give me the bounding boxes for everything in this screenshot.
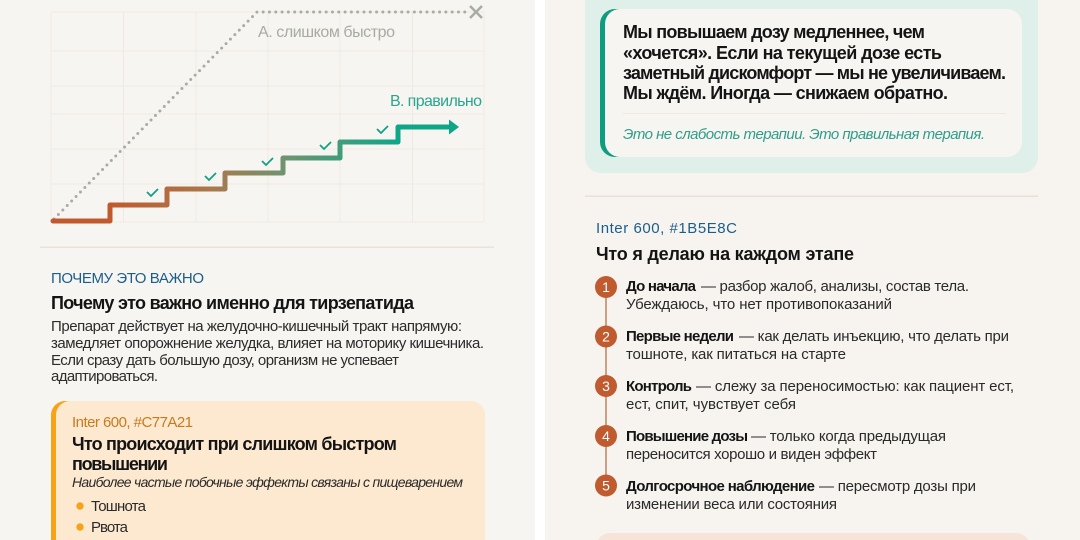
quote text: Мы ждём. Иногда — снижаем обратно. [623,83,948,103]
callout title: повышении [72,454,168,474]
step 5: 5 [602,478,610,494]
callout eyebrow: Inter 600, #C77A21 [72,414,193,431]
step 4: — только когда предыдущая [751,428,946,445]
step 2 [595,326,1009,363]
step 1 [595,276,969,313]
dotted line: too fast [54,12,470,219]
callout subtitle: Наиболее частые побочные эффекты связаны с пищеварением [72,474,463,490]
bullet: vomiting: Рвота [91,519,129,536]
step 2: — как делать инъекцию, что делать при [739,328,1009,345]
timeline: steps [595,276,1014,513]
body text [51,318,484,385]
line chart: dose escalation [51,6,484,222]
step 3: — слежу за переносимостью: как пациент ест, [696,378,1014,395]
step 5 [595,474,976,513]
step 3: Контроль [626,378,692,395]
step 5: изменении веса или состояния [626,496,837,513]
step 1: — разбор жалоб, анализы, состав тела. [701,278,969,295]
callout title [72,434,397,474]
quote text [623,22,1006,103]
step 3: 3 [602,378,610,394]
step 4: Повышение дозы [626,428,748,445]
callout: side effects [51,401,485,540]
step 2: Первые недели [626,328,734,345]
callout: principle [585,0,1038,173]
step 3 [595,375,1014,413]
icons: check marks [147,126,388,196]
stepped line: correct [53,127,450,221]
step 5: Долгосрочное наблюдение [626,478,815,495]
step 1: До начала [626,278,697,295]
label: too fast: А. слишком быстро [258,24,395,41]
body text: Препарат действует на желудочно-кишечный тракт напрямую: [51,318,462,335]
callout title: Что происходит при слишком быстром [72,434,397,454]
step 5: — пересмотр дозы при [819,478,976,495]
step 2: 2 [602,328,610,344]
step 3: ест, спит, чувствует себя [626,396,796,413]
body text: адаптироваться. [51,368,158,385]
eyebrow heading: Inter 600, #1B5E8C [596,220,737,237]
heading: Что я делаю на каждом этапе [596,244,854,264]
body text: замедляет опорожнение желудка, влияет на моторику кишечника. [51,335,484,352]
step 2: тошноте, как питаться на старте [626,346,846,363]
eyebrow heading: ПОЧЕМУ ЭТО ВАЖНО [51,270,204,287]
heading: Почему это важно именно для тирзепатида [51,293,415,313]
icon: cross [470,6,482,18]
quote text: «хочется». Если на текущей дозе есть [623,43,942,63]
quote text: заметный дискомфорт — мы не увеличиваем. [623,63,1006,83]
bullet: nausea: Тошнота [91,498,147,515]
panel: right column [545,0,1080,540]
step 1: Убеждаюсь, что нет противопоказаний [626,296,892,313]
quote text: Мы повышаем дозу медленнее, чем [623,22,925,42]
panel: left column [0,0,535,540]
body text: Если сразу дать большую дозу, организм не успевает [51,352,399,369]
step 4: переносится хорошо и виден эффект [626,446,877,463]
step 4 [595,425,946,463]
label: correct: В. правильно [390,93,482,110]
arrowhead [449,120,459,134]
quote conclusion: Это не слабость терапии. Это правильная терапия. [623,126,985,143]
callout: bottom panel [596,533,1030,540]
step 1: 1 [602,279,610,295]
step 4: 4 [602,428,610,444]
